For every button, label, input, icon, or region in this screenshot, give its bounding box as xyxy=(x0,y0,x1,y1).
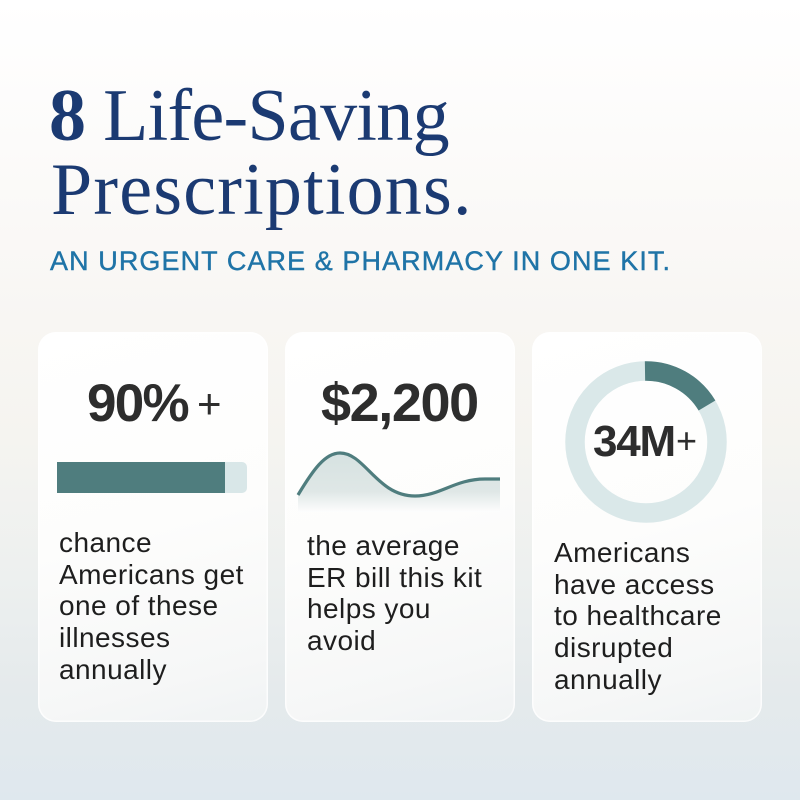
panel: 34M+ statistic xyxy=(532,332,762,722)
description: illnesses xyxy=(59,622,170,653)
description: annually xyxy=(554,664,662,695)
progress bar xyxy=(57,462,247,493)
description: to healthcare xyxy=(554,600,722,631)
description: avoid xyxy=(307,625,376,656)
description: one of these xyxy=(59,590,219,621)
area line chart xyxy=(296,451,500,507)
subtitle: AN URGENT CARE & PHARMACY IN ONE KIT. xyxy=(50,246,671,276)
description xyxy=(59,527,244,685)
statistic: $2,200: $2,200 xyxy=(321,373,478,433)
description: disrupted xyxy=(554,632,673,663)
panel: $2,200 statistic xyxy=(285,332,515,722)
description: chance xyxy=(59,527,152,558)
description: the average xyxy=(307,530,460,561)
description: Americans get xyxy=(59,559,244,590)
title xyxy=(49,75,473,231)
title: Prescriptions. xyxy=(51,149,473,231)
description xyxy=(307,530,482,656)
title: 8 Life-Saving xyxy=(49,75,449,157)
statistic: 34M+: 34M+ xyxy=(593,417,696,466)
panel: 90% statistic xyxy=(38,332,268,722)
donut chart xyxy=(565,361,727,523)
description xyxy=(554,537,722,695)
statistic: 90%: 90%+ xyxy=(87,374,220,433)
description: annually xyxy=(59,654,167,685)
description: have access xyxy=(554,569,715,600)
description: helps you xyxy=(307,593,431,624)
description: Americans xyxy=(554,537,690,568)
description: ER bill this kit xyxy=(307,562,482,593)
